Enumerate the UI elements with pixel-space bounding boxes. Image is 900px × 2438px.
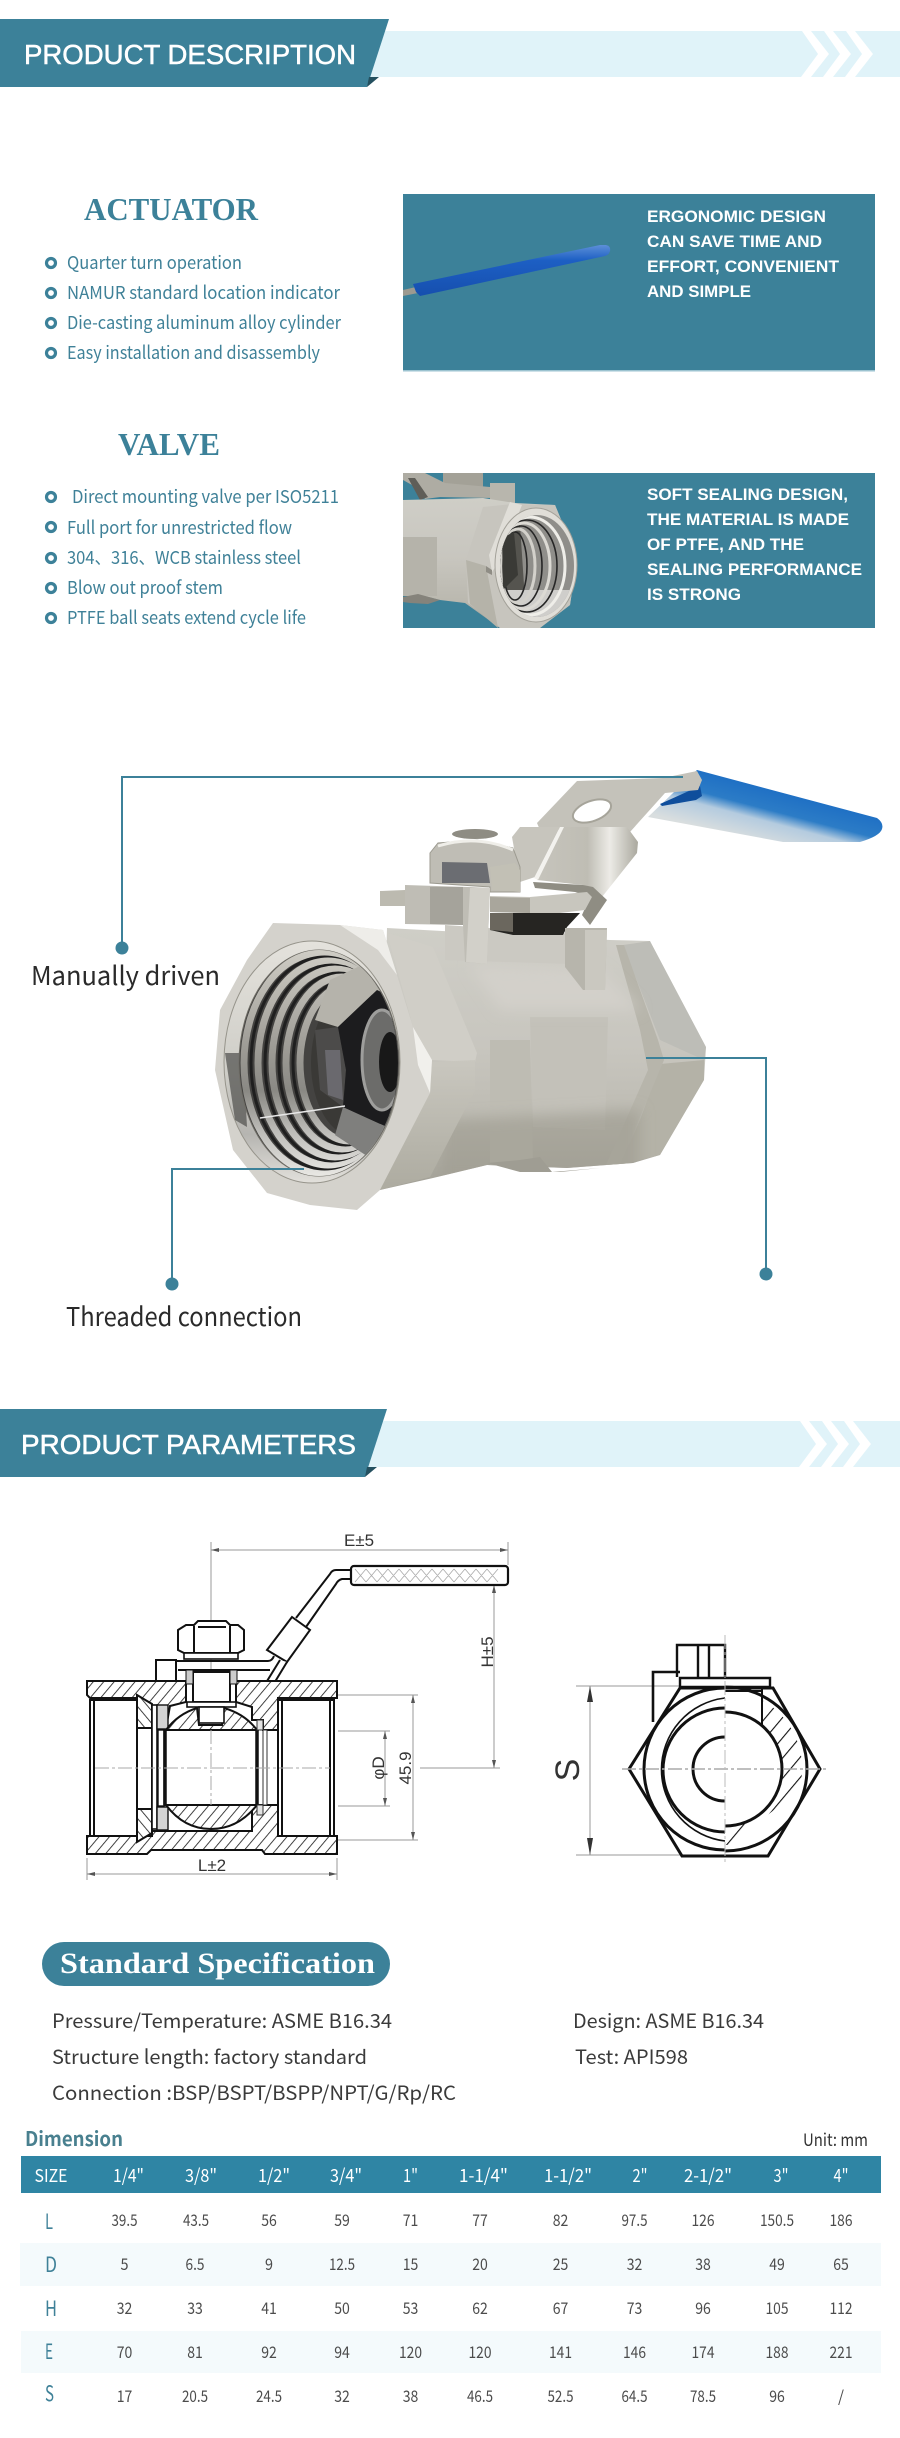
- dimension lines: [87, 1542, 508, 1880]
- section header: product description: [0, 19, 900, 87]
- callout: unlabeled body pointer: [646, 1058, 772, 1280]
- body and back hex: [380, 928, 706, 1190]
- table header row: 1/4": [113, 2162, 144, 2188]
- panel: soft sealing callout: THE MATERIAL IS MADE: [647, 510, 849, 529]
- icon: blue handle rod: [403, 245, 610, 296]
- hatched section: [725, 1700, 802, 1845]
- mounting pad left: [405, 885, 490, 964]
- actuator feature list: Easy installation and disassembly: [67, 339, 321, 365]
- table header row: 2-1/2": [684, 2162, 732, 2188]
- row D: 32: [627, 2251, 642, 2275]
- callout: manually driven: [31, 777, 683, 993]
- row E: 146: [623, 2339, 646, 2363]
- panel: actuator handle callout: CAN SAVE TIME AND: [647, 232, 822, 251]
- row D: 25: [553, 2251, 568, 2275]
- body section: [87, 1670, 337, 1854]
- row H: 112: [830, 2295, 853, 2319]
- table header row: 3/8": [185, 2162, 217, 2188]
- row E: 188: [766, 2339, 789, 2363]
- row L: 82: [553, 2207, 568, 2231]
- row L: 71: [403, 2207, 418, 2231]
- panel: actuator handle callout: ERGONOMIC DESIGN: [647, 207, 826, 226]
- row L: 126: [692, 2207, 715, 2231]
- panel: actuator handle callout: EFFORT, CONVENIENT: [647, 257, 840, 276]
- table header row: 3": [774, 2162, 788, 2188]
- specification text block: Test: API598: [575, 2041, 688, 2070]
- panel: soft sealing callout: SEALING PERFORMANCE: [647, 560, 862, 579]
- row L: L: [45, 2206, 53, 2236]
- mounting pad right: [565, 928, 607, 990]
- row H: 105: [766, 2295, 789, 2319]
- valve feature list: [46, 483, 339, 630]
- valve feature list: 304、316、WCB stainless steel: [67, 544, 301, 570]
- table header row: 2": [632, 2162, 648, 2188]
- row H: 33: [187, 2295, 203, 2319]
- callout: manually driven: Manually driven: [31, 956, 220, 993]
- section header: product parameters: PRODUCT PARAMETERS: [21, 1429, 356, 1460]
- dark gap under lever: [490, 913, 580, 935]
- valve close-up photo: [403, 473, 577, 628]
- dimension table: [20, 2156, 881, 2408]
- row D: D: [45, 2249, 57, 2279]
- row E: 221: [830, 2339, 852, 2363]
- specification text block: Pressure/Temperature: ASME B16.34: [52, 2005, 392, 2034]
- row D: 49: [769, 2251, 785, 2275]
- row L: 77: [472, 2207, 488, 2231]
- stem nut: [430, 829, 520, 892]
- valve product photo: [215, 770, 882, 1210]
- dimension S: [549, 1686, 680, 1855]
- specification text block: Connection :BSP/BSPT/BSPP/NPT/G/Rp/RC: [52, 2077, 456, 2106]
- row E: 120: [399, 2339, 422, 2363]
- row S: 78.5: [690, 2383, 716, 2407]
- handle clip: [512, 827, 638, 925]
- row H: H: [45, 2293, 57, 2323]
- callout: threaded connection: Threaded connection: [66, 1297, 302, 1334]
- panel: actuator handle callout: [403, 194, 875, 372]
- row H: 96: [695, 2295, 711, 2319]
- row H: 32: [117, 2295, 132, 2319]
- row S: 32: [334, 2383, 350, 2407]
- handle plate: [537, 771, 702, 832]
- row L: 150.5: [760, 2207, 794, 2231]
- lower lug: [487, 1157, 600, 1172]
- row L: 59: [334, 2207, 350, 2231]
- row E: 94: [334, 2339, 350, 2363]
- heading: actuator: ACTUATOR: [84, 191, 259, 227]
- row E: E: [45, 2336, 53, 2366]
- row L: 43.5: [183, 2207, 209, 2231]
- stop pad: [156, 1660, 176, 1681]
- panel: actuator handle callout: AND SIMPLE: [647, 282, 751, 301]
- valve feature list: Full port for unrestricted flow: [67, 514, 292, 540]
- row D: 9: [265, 2251, 273, 2275]
- table heading: dimension: Dimension: [25, 2123, 123, 2152]
- table header row: 3/4": [330, 2162, 362, 2188]
- row H: 67: [553, 2295, 568, 2319]
- row H: 41: [261, 2295, 277, 2319]
- row S: 64.5: [622, 2383, 648, 2407]
- heading: valve: VALVE: [118, 426, 220, 462]
- row H: [45, 2293, 853, 2323]
- valve feature list: Direct mounting valve per ISO5211: [72, 483, 339, 509]
- technical drawing: side section: [87, 1531, 508, 1880]
- row E: 120: [468, 2339, 492, 2363]
- row L: [45, 2206, 853, 2236]
- valve feature list: PTFE ball seats extend cycle life: [67, 604, 306, 630]
- pill heading: standard specification: [42, 1942, 390, 1986]
- hex nut: [178, 1621, 244, 1659]
- row S: 46.5: [467, 2383, 493, 2407]
- row S: 38: [403, 2383, 418, 2407]
- threaded bore: [224, 941, 402, 1183]
- row S: 20.5: [182, 2383, 208, 2407]
- dimension S: S: [549, 1759, 587, 1781]
- row L: 39.5: [112, 2207, 138, 2231]
- table header row: 4": [834, 2162, 848, 2188]
- valve feature list: Blow out proof stem: [67, 574, 223, 600]
- actuator feature list: NAMUR standard location indicator: [67, 279, 341, 305]
- panel: soft sealing callout: OF PTFE, AND THE: [647, 535, 804, 554]
- actuator feature list: Die-casting aluminum alloy cylinder: [67, 309, 342, 335]
- table header row: 1": [403, 2162, 418, 2188]
- row D: 38: [695, 2251, 711, 2275]
- row H: 73: [627, 2295, 642, 2319]
- row H: 50: [334, 2295, 350, 2319]
- row E: 70: [117, 2339, 132, 2363]
- panel: soft sealing callout: [403, 473, 875, 628]
- dimension labels: H±5: [478, 1636, 497, 1668]
- dimension labels: E±5: [344, 1531, 374, 1550]
- neck between mounting pads: [445, 925, 600, 965]
- table unit: Unit: mm: [803, 2126, 868, 2151]
- row E: 141: [549, 2339, 572, 2363]
- row S: /: [838, 2383, 845, 2407]
- table header row: 1-1/2": [544, 2162, 592, 2188]
- row D: 15: [403, 2251, 418, 2275]
- row H: 53: [403, 2295, 418, 2319]
- section header: product parameters: [0, 1409, 900, 1477]
- actuator feature list: Quarter turn operation: [67, 249, 242, 275]
- row E: 81: [187, 2339, 203, 2363]
- row D: 5: [120, 2251, 129, 2275]
- specification text block: Design: ASME B16.34: [573, 2005, 764, 2034]
- row D: 65: [833, 2251, 849, 2275]
- panel: soft sealing callout: IS STRONG: [647, 585, 741, 604]
- table header row: [21, 2156, 881, 2193]
- panel: soft sealing callout: SOFT SEALING DESIGN,: [647, 485, 848, 504]
- row S: 96: [769, 2383, 785, 2407]
- row E: [21, 2331, 881, 2373]
- hex outline and handle stop: [629, 1645, 820, 1856]
- hex front face: [215, 923, 432, 1210]
- row D: 6.5: [186, 2251, 205, 2275]
- row E: 92: [261, 2339, 277, 2363]
- bore arcs: [622, 1635, 826, 1865]
- table header row: 1/2": [258, 2162, 290, 2188]
- row S: 17: [117, 2383, 132, 2407]
- section header: product description: PRODUCT DESCRIPTION: [24, 39, 356, 70]
- row S: 52.5: [548, 2383, 574, 2407]
- handle grip: [648, 770, 882, 842]
- row S: [45, 2378, 845, 2408]
- row D: 12.5: [329, 2251, 355, 2275]
- row D: 20: [472, 2251, 488, 2275]
- dimension labels: L±2: [198, 1856, 226, 1875]
- actuator feature list: [46, 249, 342, 365]
- row E: 174: [692, 2339, 715, 2363]
- specification text block: [52, 2005, 764, 2106]
- front hex side facets: [387, 933, 477, 1062]
- technical drawing: end view: [549, 1635, 826, 1865]
- dimension labels: 45.9: [396, 1751, 415, 1785]
- specification text block: Structure length: factory standard: [52, 2041, 367, 2070]
- lever plate: [380, 890, 592, 913]
- callout: threaded connection: [66, 1169, 304, 1334]
- table header row: SIZE: [34, 2162, 68, 2188]
- row L: 56: [261, 2207, 277, 2231]
- handle: [156, 1566, 508, 1690]
- dimension labels: [198, 1531, 497, 1875]
- row L: 186: [830, 2207, 853, 2231]
- row D: [20, 2243, 881, 2286]
- row H: 62: [472, 2295, 488, 2319]
- row S: S: [45, 2378, 54, 2408]
- dimension labels: φD: [369, 1756, 388, 1780]
- pill heading: standard specification: Standard Specification: [60, 1947, 375, 1980]
- row L: 97.5: [622, 2207, 648, 2231]
- row S: 24.5: [256, 2383, 282, 2407]
- body shading: [440, 941, 706, 1180]
- table header row: 1-1/4": [459, 2162, 508, 2188]
